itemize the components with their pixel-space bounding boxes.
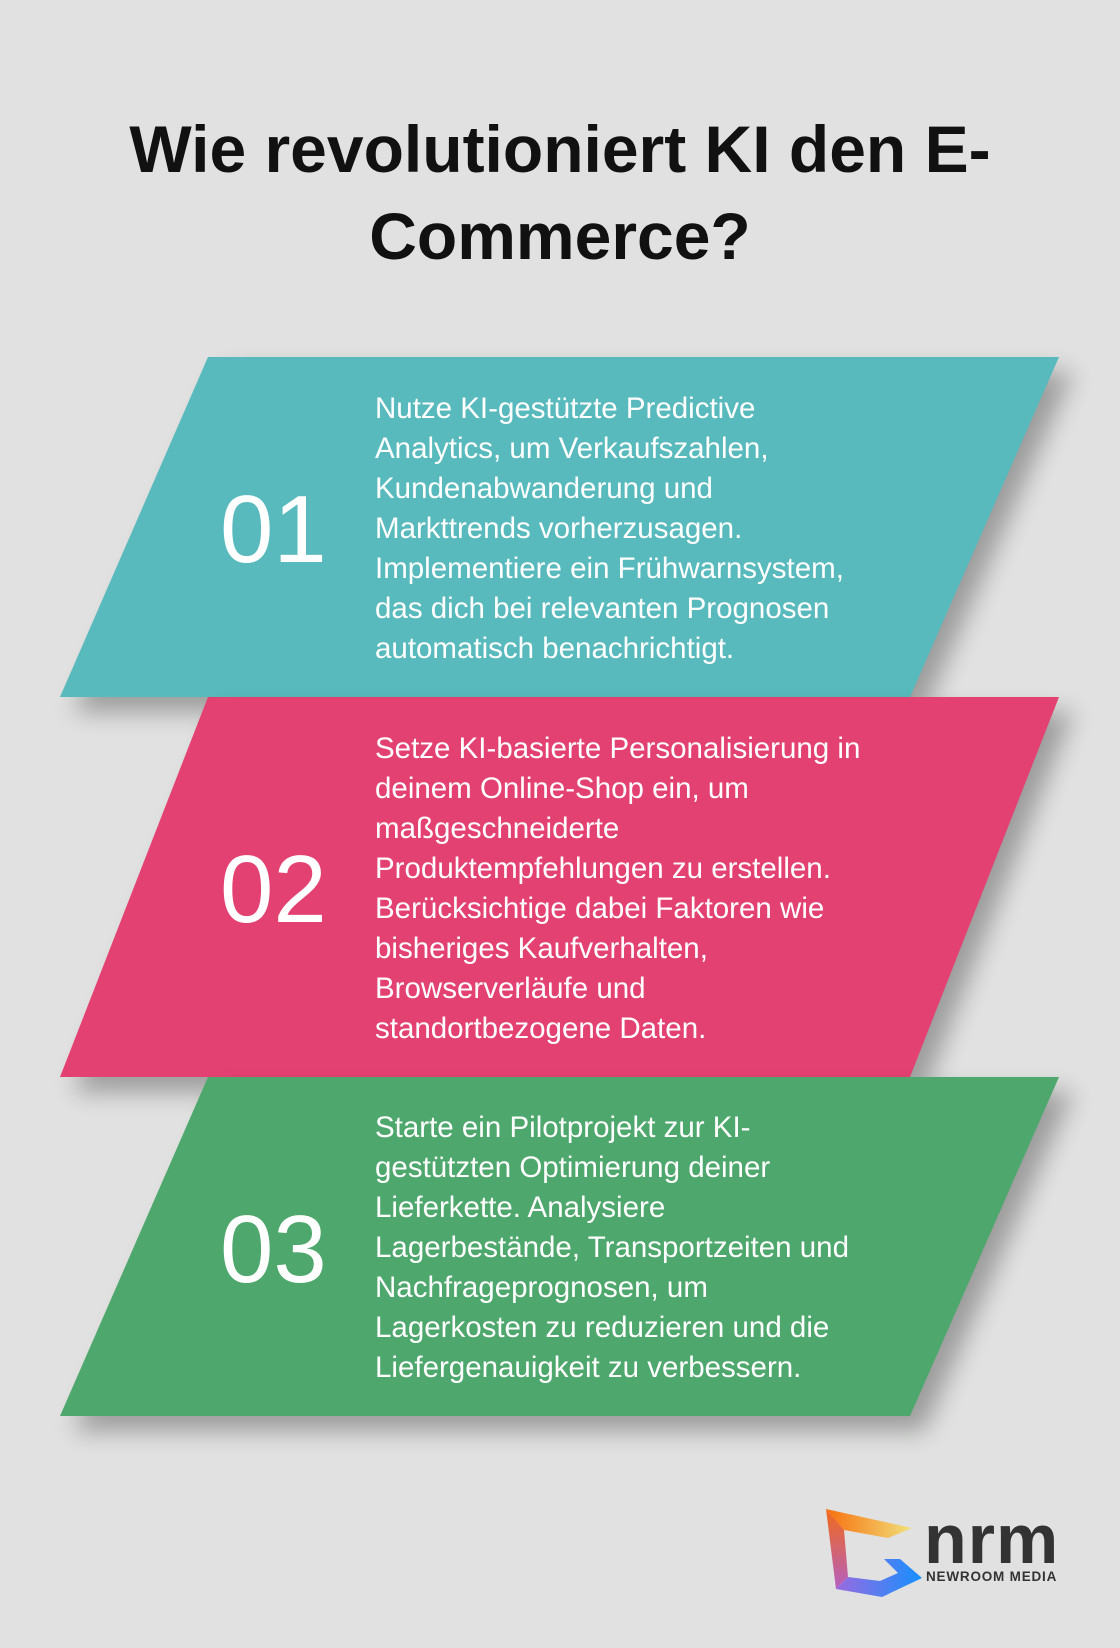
text 2: Browserverläufe und xyxy=(375,972,646,1005)
text 3: Lieferkette. Analysiere xyxy=(375,1191,665,1224)
logo: NEWROOM MEDIA xyxy=(926,1569,1057,1584)
text 1: automatisch benachrichtigt. xyxy=(375,632,734,665)
text 2: standortbezogene Daten. xyxy=(375,1012,706,1045)
text 2 xyxy=(375,732,860,1045)
number 02: 02 xyxy=(220,836,327,943)
text 2: Produktempfehlungen zu erstellen. xyxy=(375,852,831,885)
number 03: 03 xyxy=(220,1196,327,1303)
title: Wie revolutioniert KI den E- xyxy=(129,112,991,186)
text 1: Markttrends vorherzusagen. xyxy=(375,512,742,545)
text 3: Lagerbestände, Transportzeiten und xyxy=(375,1231,849,1264)
text 2: bisheriges Kaufverhalten, xyxy=(375,932,708,965)
text 3: Nachfrageprognosen, um xyxy=(375,1271,708,1304)
logo text: nrm xyxy=(924,1500,1059,1578)
icon: logo mark xyxy=(826,1509,922,1597)
text 1: Nutze KI-gestützte Predictive xyxy=(375,392,755,425)
text 3 xyxy=(375,1111,849,1384)
text 2: maßgeschneiderte xyxy=(375,812,619,845)
panel 1 shape xyxy=(60,357,1073,712)
logo xyxy=(826,1500,1059,1597)
text 2: Berücksichtige dabei Faktoren wie xyxy=(375,892,824,925)
title xyxy=(129,112,991,273)
text 2: deinem Online-Shop ein, um xyxy=(375,772,749,805)
text 1 xyxy=(375,392,844,665)
text 1: Analytics, um Verkaufszahlen, xyxy=(375,432,769,465)
text 1: Implementiere ein Frühwarnsystem, xyxy=(375,552,844,585)
panel 2 shape xyxy=(60,697,1073,1092)
text 1: Kundenabwanderung und xyxy=(375,472,713,505)
text 3: Lagerkosten zu reduzieren und die xyxy=(375,1311,829,1344)
text 1: das dich bei relevanten Prognosen xyxy=(375,592,829,625)
text 2: Setze KI-basierte Personalisierung in xyxy=(375,732,860,765)
text 3: Liefergenauigkeit zu verbessern. xyxy=(375,1351,801,1384)
number 01: 01 xyxy=(220,476,327,583)
panel 3 shape xyxy=(60,1077,1073,1431)
text 3: Starte ein Pilotprojekt zur KI- xyxy=(375,1111,750,1144)
text 3: gestützten Optimierung deiner xyxy=(375,1151,770,1184)
title: Commerce? xyxy=(369,199,751,273)
